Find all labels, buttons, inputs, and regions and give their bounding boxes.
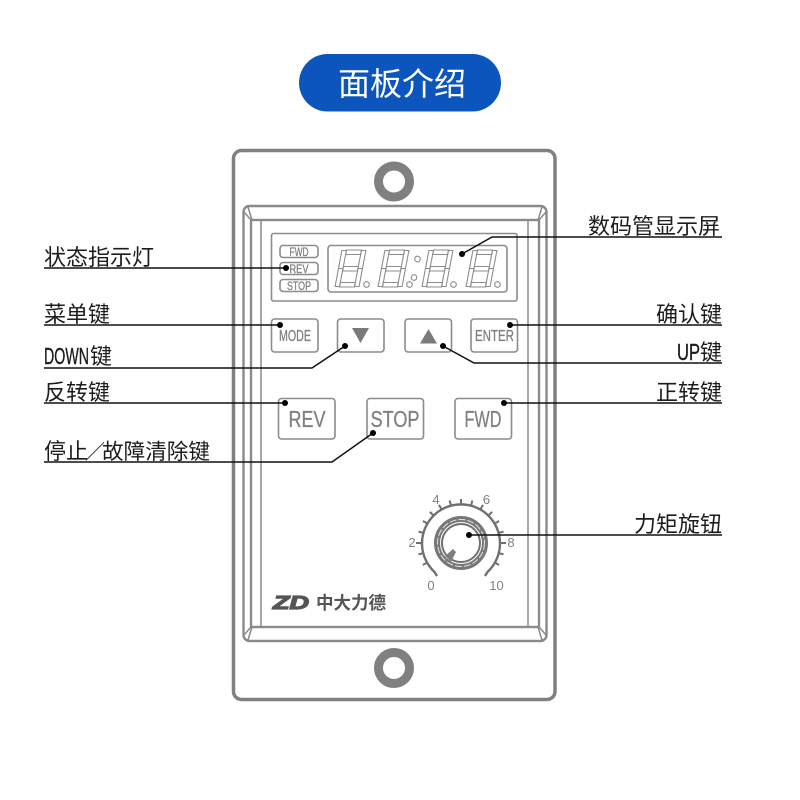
brand logo: ZD	[272, 593, 309, 613]
scale numbers: 4	[432, 492, 440, 507]
callout: forward key: 正转键	[656, 380, 722, 405]
brand logo	[272, 593, 386, 613]
callout: stop / fault clear key	[44, 430, 376, 464]
status indicator STOP: STOP	[287, 279, 311, 293]
callout: stop / fault clear key: ／	[85, 442, 105, 464]
status indicator FWD: FWD	[290, 245, 309, 259]
callout: status indicator: 状态指示灯	[44, 245, 154, 270]
MODE button	[272, 319, 318, 352]
callout: reverse key: 反转键	[44, 380, 110, 405]
brand logo: 中大力德	[316, 593, 386, 613]
callout: up key: 键	[700, 340, 722, 365]
callout: forward key	[501, 380, 722, 406]
STOP button	[367, 398, 424, 439]
callout: digital display	[459, 214, 722, 257]
callout: up key: UP	[677, 339, 700, 365]
decimal points and colon	[364, 256, 500, 287]
scale numbers	[408, 492, 515, 593]
callout: up key	[440, 339, 722, 365]
REV button	[278, 398, 335, 439]
status indicator REV	[280, 262, 318, 276]
callout: down key	[44, 343, 348, 369]
torque knob	[408, 492, 515, 593]
callout: confirm key: 确认键	[656, 302, 722, 327]
callout: digital display: 数码管显示屏	[588, 214, 720, 239]
knob pointer	[445, 549, 456, 562]
callout: reverse key	[44, 380, 288, 406]
knob scale	[416, 499, 506, 576]
callout: torque knob	[466, 512, 722, 538]
seven segment digit 3	[422, 250, 453, 287]
device panel	[234, 150, 555, 700]
scale numbers: 6	[483, 492, 490, 507]
REV button: REV	[288, 406, 326, 432]
MODE button: MODE	[279, 328, 311, 345]
scale numbers: 10	[489, 578, 504, 593]
callout: menu key	[44, 302, 283, 328]
STOP button: STOP	[370, 406, 420, 432]
ENTER button: ENTER	[475, 328, 514, 345]
title pill	[299, 54, 501, 112]
DOWN button	[338, 319, 384, 352]
display window	[272, 234, 517, 301]
bottom mounting hole	[378, 652, 410, 684]
callout: down key: DOWN	[44, 343, 89, 369]
inner bevel frame	[244, 206, 546, 641]
top mounting hole	[378, 166, 410, 197]
callout: menu key: 菜单键	[44, 302, 110, 327]
seven segment digit 1	[335, 250, 366, 287]
ENTER button	[471, 319, 518, 352]
callout: stop / fault clear key: 停止	[44, 439, 88, 464]
scale numbers: 2	[408, 535, 416, 550]
callout: confirm key	[507, 302, 722, 328]
scale numbers: 0	[427, 578, 435, 593]
callout: down key: 键	[90, 344, 112, 369]
status indicator REV: REV	[290, 262, 308, 276]
scale numbers: 8	[507, 535, 515, 550]
FWD button	[455, 398, 512, 439]
title pill: 面板介绍	[338, 66, 466, 102]
seven segment digit 4	[466, 250, 497, 287]
callout: torque knob: 力矩旋钮	[634, 512, 722, 537]
panel outer shell	[234, 150, 555, 700]
UP button	[405, 319, 452, 352]
seven segment digit 2	[378, 250, 409, 287]
callout: stop / fault clear key: 故障清除键	[102, 439, 210, 464]
callout: status indicator	[44, 245, 289, 271]
knob ring	[437, 519, 485, 567]
FWD button: FWD	[464, 406, 502, 432]
